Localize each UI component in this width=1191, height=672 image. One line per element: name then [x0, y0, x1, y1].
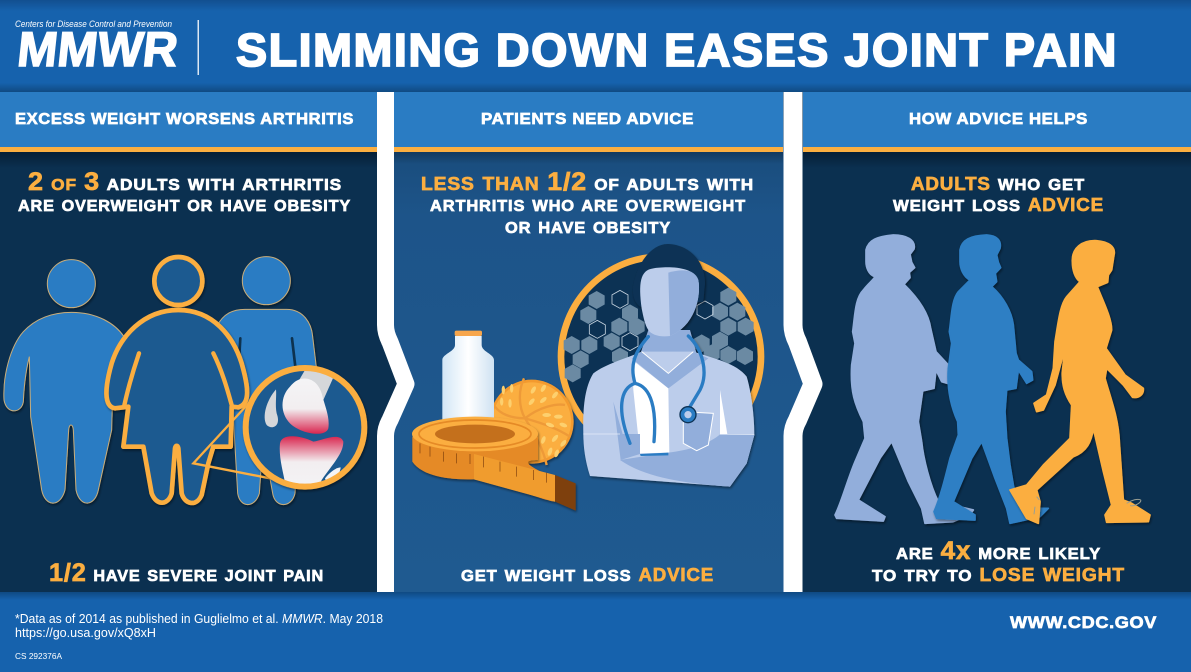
text: half have severe joint pain: 1/2 HAVE SEVERE JOINT PAIN	[49, 559, 324, 587]
illustration: doctor, tape, orange and bottle	[412, 244, 761, 511]
footnote: *Data as of 2014 as published in Guglielmo et al. MMWR. May 2018	[15, 612, 383, 626]
doctor	[583, 244, 754, 487]
header band	[0, 0, 1191, 92]
icon: three people with knee inset	[4, 257, 364, 505]
footnote link: https://go.usa.gov/xQ8xH	[15, 626, 156, 640]
panel: patients need advice	[386, 90, 813, 592]
milk bottle	[442, 331, 494, 420]
text: 2 of 3 adults: 2 OF 3 ADULTS WITH ARTHRITIS	[28, 168, 342, 196]
agency line: Centers for Disease Control and Prevention	[15, 19, 172, 30]
text: get weight loss advice: GET WEIGHT LOSS ADVICE	[461, 565, 714, 585]
illustration: three walking silhouettes	[835, 235, 1150, 523]
measuring tape	[412, 417, 576, 511]
walker mid blue	[934, 235, 1048, 523]
person left	[4, 260, 124, 503]
text: weight loss advice: WEIGHT LOSS ADVICE	[893, 195, 1104, 215]
panel: how advice helps	[793, 90, 1191, 592]
text: arthritis overweight: ARTHRITIS WHO ARE OVERWEIGHT	[430, 198, 746, 215]
text: 4x more likely: ARE 4x MORE LIKELY	[896, 537, 1101, 565]
knee inset	[246, 368, 364, 493]
walker orange	[1010, 241, 1150, 523]
person right	[217, 257, 317, 505]
arrow: first chevron divider	[386, 88, 406, 592]
callout lines	[193, 400, 270, 478]
text: or have obesity: OR HAVE OBESITY	[505, 220, 671, 237]
arrow: second chevron divider	[793, 88, 813, 592]
text: adults who get: ADULTS WHO GET	[911, 174, 1085, 194]
heading: patients need advice: PATIENTS NEED ADVICE	[481, 111, 694, 128]
publication code: CS 292376A	[15, 652, 63, 661]
heading: how advice helps: HOW ADVICE HELPS	[909, 111, 1088, 128]
shoe laces	[1034, 497, 1141, 514]
orange slice	[491, 378, 572, 465]
website: WWW.CDC.GOV	[1010, 613, 1157, 632]
header divider	[198, 20, 199, 75]
MMWR logo: MMWR	[15, 23, 181, 77]
footer band	[0, 592, 1191, 672]
text: less than half: LESS THAN 1/2 OF ADULTS WITH	[421, 168, 754, 196]
text: try to lose weight: TO TRY TO LOSE WEIGHT	[872, 565, 1125, 585]
panel: excess weight worsens arthritis	[0, 90, 406, 592]
heading: excess weight: EXCESS WEIGHT WORSENS ARTHRITIS	[15, 111, 354, 128]
text: overweight or obesity: ARE OVERWEIGHT OR HAVE OBESITY	[18, 198, 351, 215]
title: SLIMMING DOWN EASES JOINT PAIN	[236, 24, 1118, 76]
walker light blue	[835, 235, 973, 523]
person center highlighted	[106, 257, 247, 503]
hexagon circle	[558, 254, 764, 425]
